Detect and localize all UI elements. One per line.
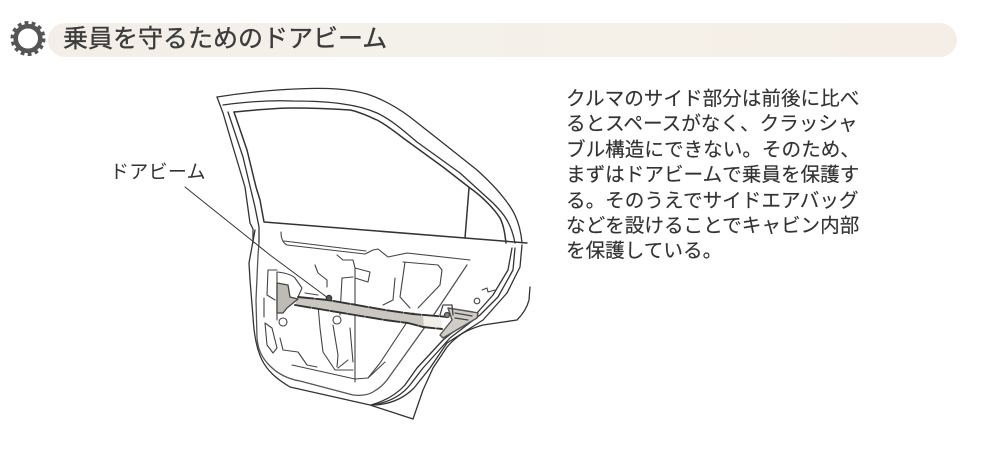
explanatory text: クルマのサイド部分は前後に比べ <box>566 88 859 110</box>
icon: gear <box>10 21 46 56</box>
leader line <box>185 187 332 301</box>
explanatory text <box>566 88 860 262</box>
beam front bracket <box>277 283 298 313</box>
explanatory text: る。そのうえでサイドエアバッグ <box>566 190 859 212</box>
beam rear bracket <box>440 308 478 338</box>
window frame <box>217 88 527 243</box>
door body outline <box>249 230 530 419</box>
explanatory text: などを設けることでキャビン内部 <box>566 215 859 237</box>
explanatory text: ブル構造にできない。そのため、 <box>566 139 860 161</box>
inner door panel details <box>264 232 495 382</box>
explanatory text: まずはドアビームで乗員を保護す <box>566 164 859 186</box>
explanatory text: を保護している。 <box>566 240 722 262</box>
title: 乗員を守るためのドアビーム <box>63 25 387 53</box>
door beam <box>277 283 478 338</box>
explanatory text: るとスペースがなく、クラッシャ <box>566 113 858 135</box>
door beam label: ドアビーム <box>110 162 206 183</box>
title bar background <box>48 23 957 57</box>
